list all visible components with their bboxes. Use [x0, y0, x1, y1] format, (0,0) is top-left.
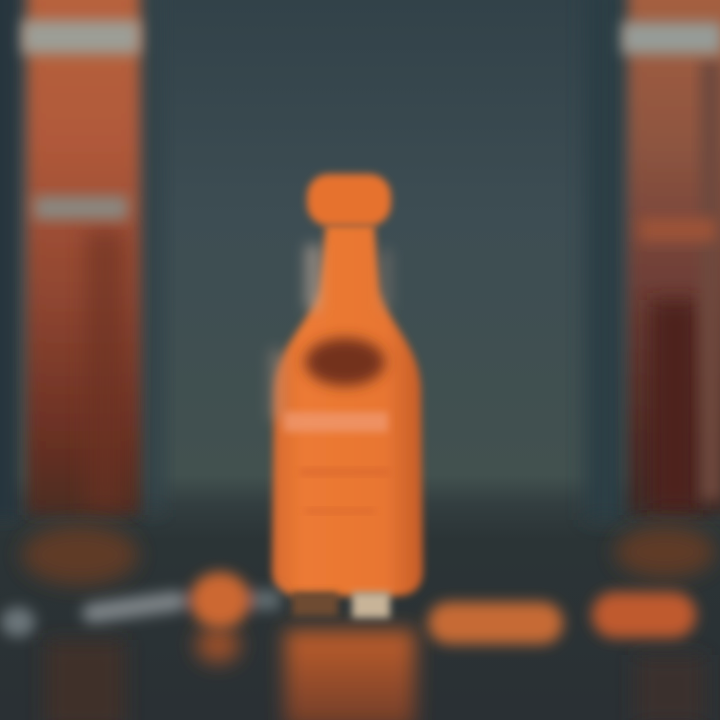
- label text band: [284, 412, 388, 432]
- right column: [615, 0, 720, 578]
- pill: far right: [592, 592, 696, 638]
- pill: centre left: [190, 572, 250, 628]
- bottle cap: [307, 174, 391, 226]
- floor reflections: [45, 627, 705, 720]
- dark liquid window: [305, 338, 385, 386]
- bottle body: [272, 225, 423, 596]
- bottle: [270, 174, 423, 618]
- label lower shading: [300, 468, 390, 476]
- pill: centre right: [428, 602, 563, 644]
- bottle base: [292, 592, 390, 618]
- glass highlights: [270, 245, 390, 420]
- scattered pills: [1, 572, 696, 644]
- left column: [22, 0, 140, 585]
- pill: white capsule: [81, 590, 188, 624]
